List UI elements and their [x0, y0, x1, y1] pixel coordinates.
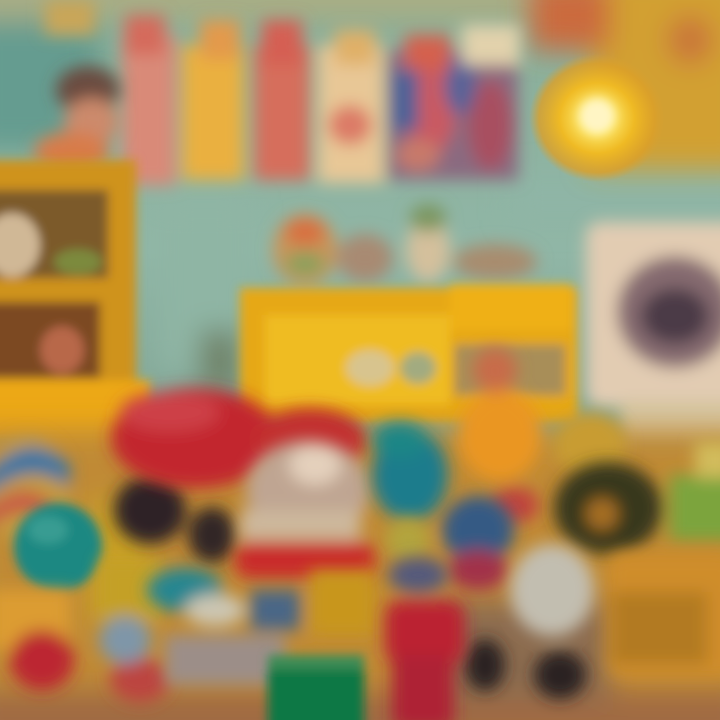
- shelf top ornaments: [273, 204, 537, 286]
- teal ball: [14, 503, 102, 591]
- framed picture at right: [586, 222, 720, 448]
- floor and lower warm base: [0, 430, 720, 720]
- figure at top left: [34, 66, 120, 172]
- teal plush: [372, 422, 448, 521]
- lower left blocks: [0, 560, 170, 702]
- red robot toy: [385, 557, 465, 720]
- red plush toy: [111, 388, 366, 488]
- green block: [268, 655, 364, 720]
- blue and red plush: [386, 496, 514, 590]
- wall top band: [0, 0, 720, 390]
- orange box bottom right: [608, 552, 720, 677]
- orange toy and ball: [458, 348, 626, 523]
- center yellow shelf: [240, 284, 578, 423]
- clown figure: [235, 440, 375, 578]
- hanging posters: [45, 0, 520, 185]
- blue toy pieces and grey tray: [147, 568, 375, 685]
- warm top right corner: [530, 0, 720, 170]
- rainbow toy at left: [0, 435, 70, 545]
- glowing lamp: [529, 54, 665, 182]
- white plush with black feet: [465, 544, 594, 699]
- left yellow shelf: [0, 160, 150, 500]
- dark toy behind red plush: [114, 476, 236, 563]
- black wheel toy: [554, 442, 720, 554]
